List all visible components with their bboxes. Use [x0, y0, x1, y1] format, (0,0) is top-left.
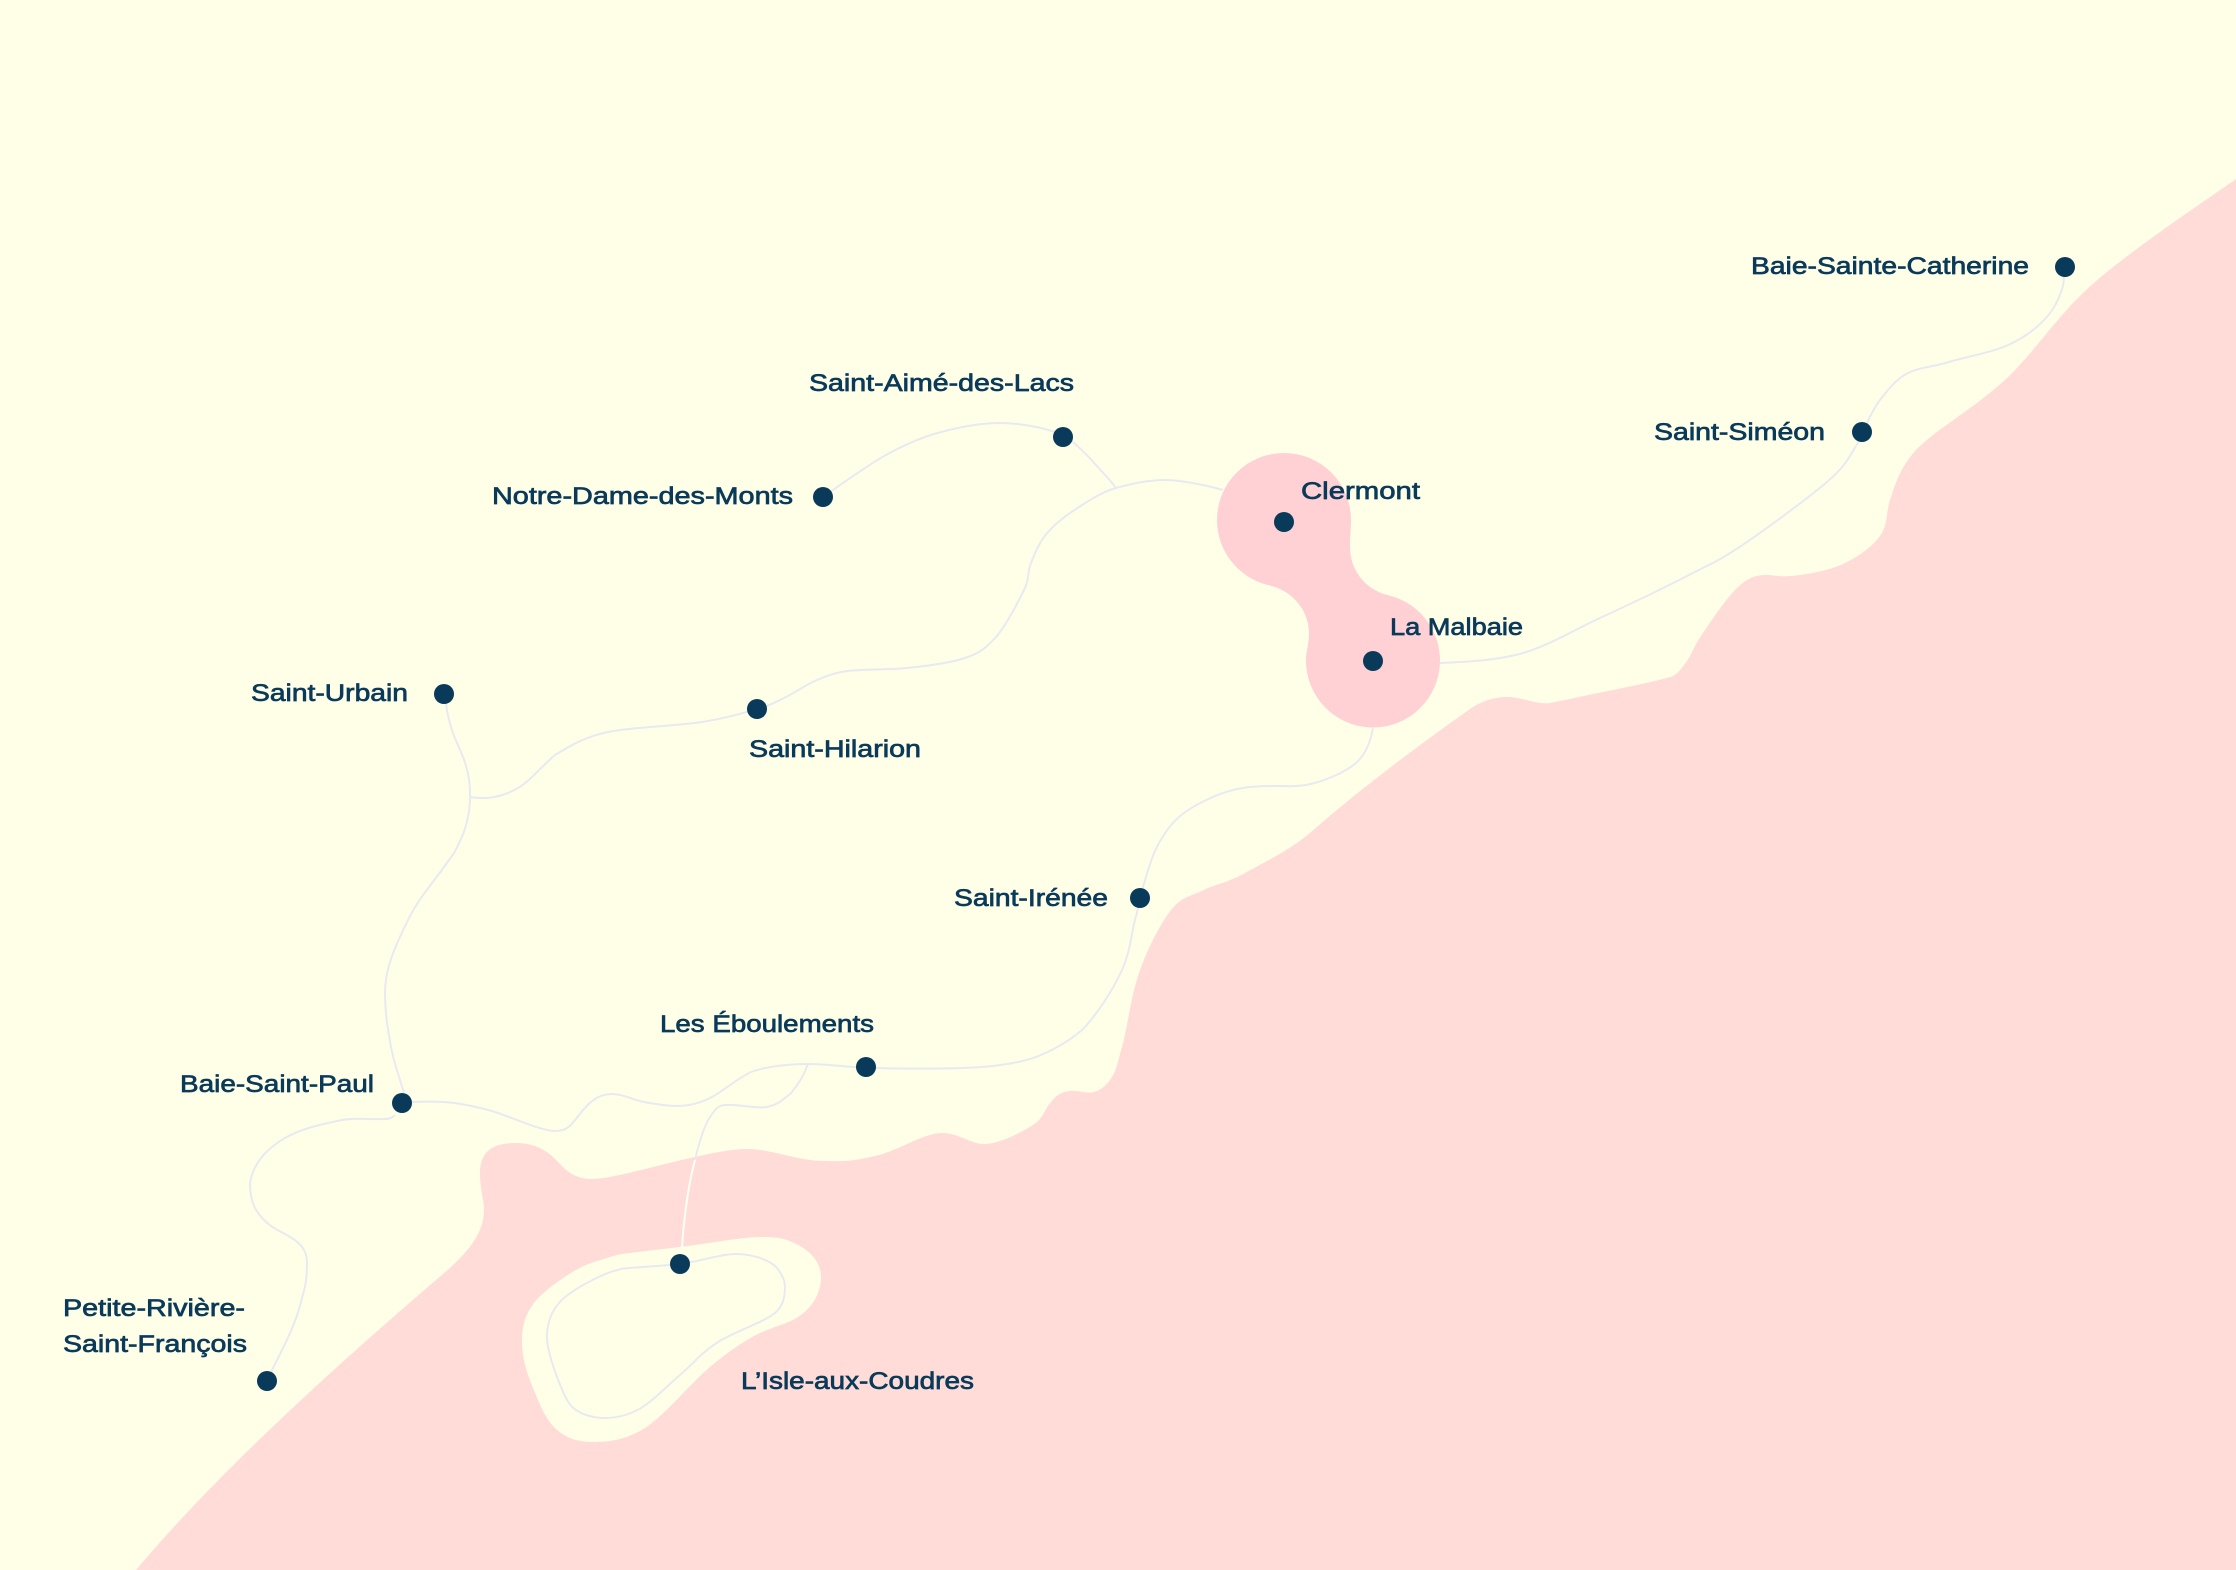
- label: La Malbaie: La Malbaie: [1390, 614, 1523, 641]
- road: Clermont to Saint-Urbain junction: [470, 480, 1223, 798]
- dot: Les Éboulements: [856, 1057, 876, 1077]
- label: Saint-Urbain: Saint-Urbain: [251, 680, 408, 707]
- road: Baie-Saint-Paul to Petite-Rivière: [250, 1115, 395, 1380]
- island: L'Isle-aux-Coudres: [522, 1237, 821, 1442]
- label: L'Isle-aux-Coudres: L’Isle-aux-Coudres: [741, 1368, 974, 1395]
- label: Clermont: Clermont: [1301, 478, 1420, 505]
- ferry line to L'Isle-aux-Coudres: [682, 1160, 695, 1248]
- dot: Notre-Dame-des-Monts: [813, 487, 833, 507]
- label: Les Éboulements: Les Éboulements: [660, 1011, 874, 1038]
- road: Notre-Dame-des-Monts to Saint-Aimé: [823, 423, 1116, 497]
- dot: Saint-Irénée: [1130, 888, 1150, 908]
- dot: Clermont: [1274, 512, 1294, 532]
- roads: [250, 277, 2064, 1418]
- dot: Baie-Sainte-Catherine: [2055, 257, 2075, 277]
- dot: La Malbaie: [1363, 651, 1383, 671]
- dot: Saint-Siméon: [1852, 422, 1872, 442]
- dot: Petite-Rivière-Saint-François: [257, 1371, 277, 1391]
- label: Petite-Rivière-Saint-François: [63, 1295, 247, 1358]
- dot: Saint-Hilarion: [747, 699, 767, 719]
- road: Baie-Sainte-Catherine to La Malbaie: [1440, 277, 2064, 663]
- dot: Saint-Urbain: [434, 684, 454, 704]
- dot: Saint-Aimé-des-Lacs: [1053, 427, 1073, 447]
- label: Baie-Saint-Paul: Baie-Saint-Paul: [180, 1071, 374, 1098]
- dot: Baie-Saint-Paul: [392, 1093, 412, 1113]
- label: Saint-Siméon: Saint-Siméon: [1654, 419, 1825, 446]
- dot: L'Isle-aux-Coudres: [670, 1254, 690, 1274]
- dots: [257, 257, 2075, 1391]
- label: Petite-Rivière-Saint-François: Petite-Rivière-: [63, 1295, 245, 1322]
- label: Saint-Hilarion: Saint-Hilarion: [749, 736, 921, 763]
- road: ferry line on mainland: [695, 1064, 808, 1160]
- road: L'Isle-aux-Coudres inner loop: [547, 1254, 785, 1418]
- road: Baie-Saint-Paul to La Malbaie: [412, 728, 1373, 1131]
- highlighted zone: Clermont and La Malbaie: [1217, 453, 1440, 728]
- label: Petite-Rivière-Saint-François: Saint-François: [63, 1331, 247, 1358]
- label: Notre-Dame-des-Monts: Notre-Dame-des-Monts: [492, 483, 793, 510]
- road: Saint-Urbain to Baie-Saint-Paul: [385, 703, 470, 1093]
- label: Saint-Irénée: Saint-Irénée: [954, 885, 1108, 912]
- label: Saint-Aimé-des-Lacs: Saint-Aimé-des-Lacs: [809, 370, 1074, 397]
- label: Baie-Sainte-Catherine: Baie-Sainte-Catherine: [1751, 253, 2029, 280]
